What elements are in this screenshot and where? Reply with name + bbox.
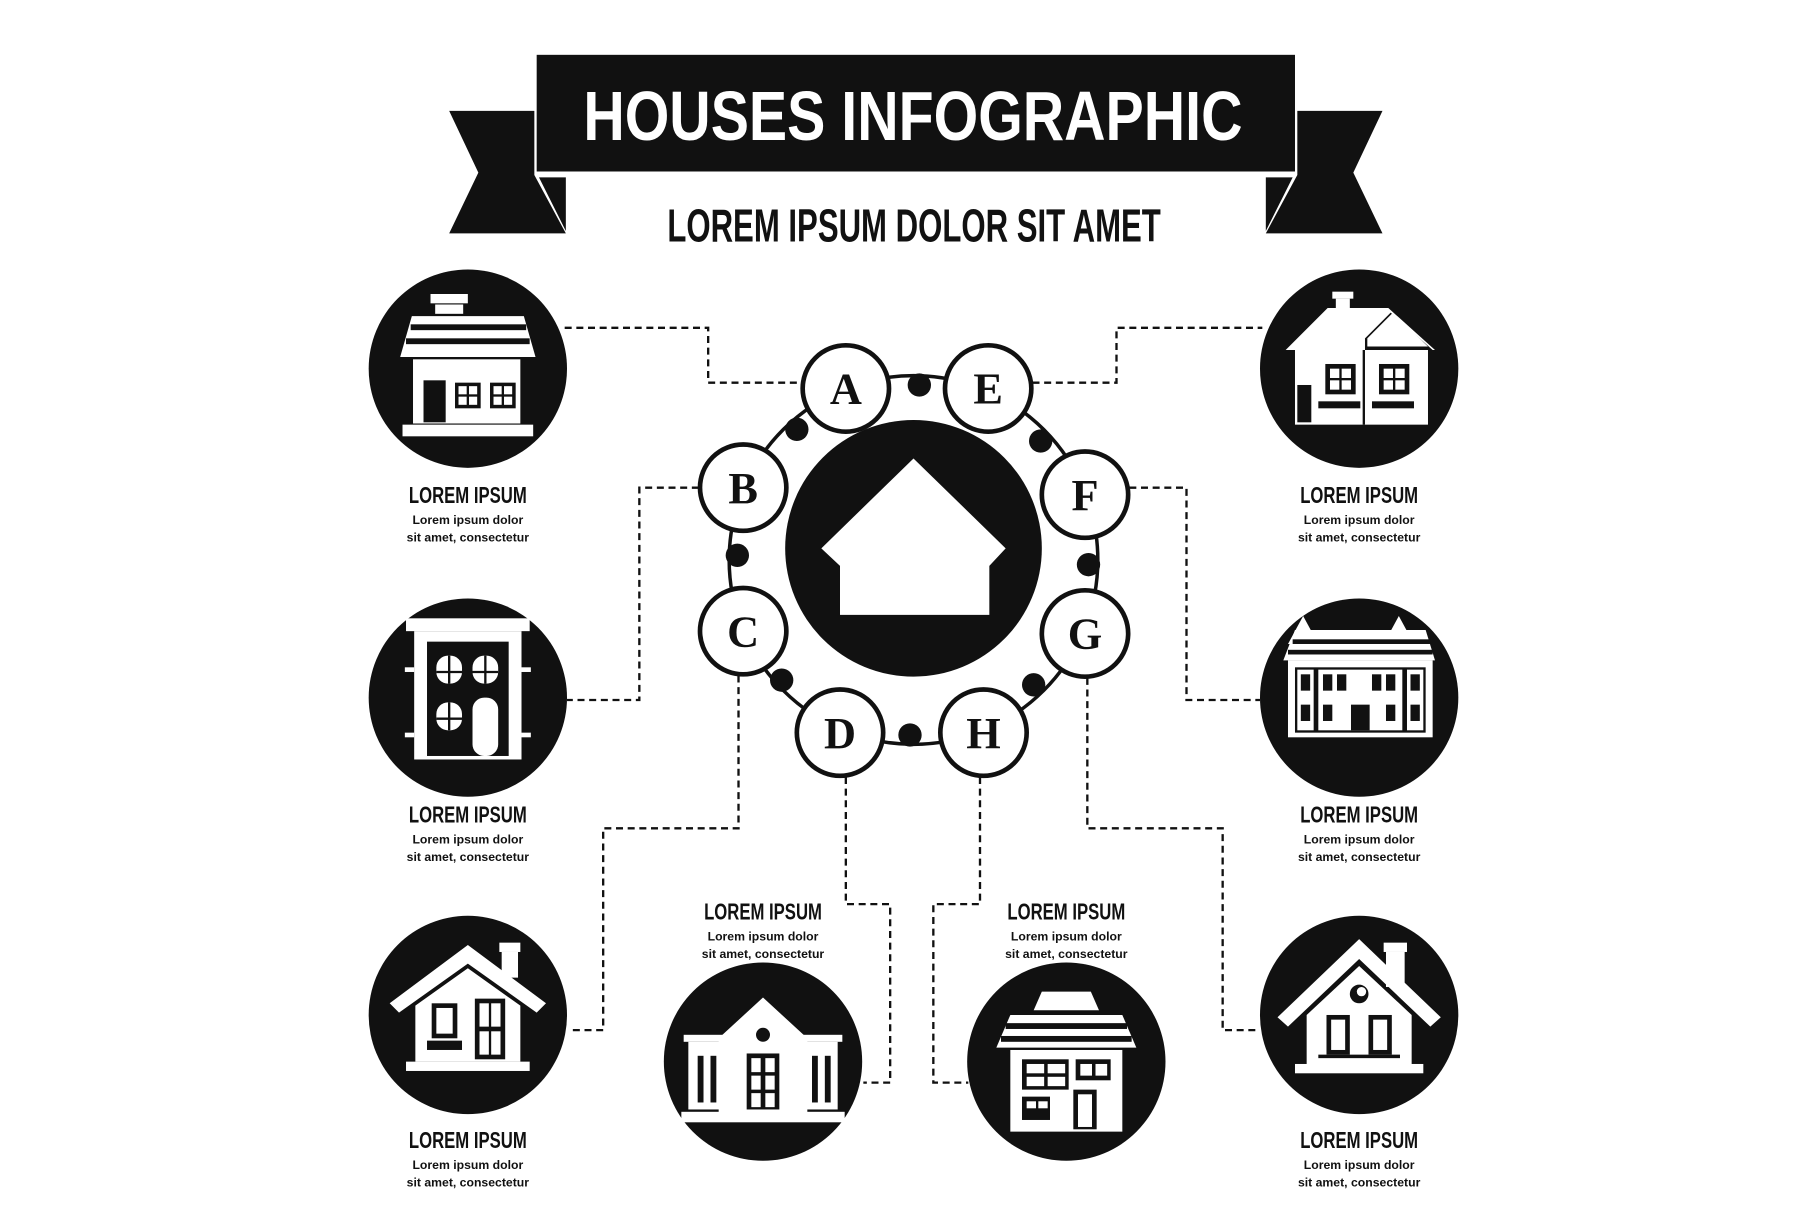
title text: HOUSES INFOGRAPHIC [583, 77, 1242, 155]
letter circles [700, 345, 1128, 776]
icon circle bottom left-center [664, 962, 862, 1161]
label 1: LOREM IPSUM [409, 482, 527, 508]
label 7: LOREM IPSUM [1300, 801, 1418, 827]
letters: G [1068, 609, 1102, 659]
labels [407, 482, 1421, 1189]
icon circle 2 [369, 598, 567, 797]
letters: H [966, 708, 1001, 758]
label 8: sit amet, consectetur [1298, 1175, 1421, 1189]
label 5: LOREM IPSUM [1007, 898, 1125, 924]
letters: D [824, 708, 856, 758]
label 8: Lorem ipsum dolor [1304, 1158, 1415, 1172]
label 5: Lorem ipsum dolor [1011, 929, 1122, 943]
letters [727, 364, 1102, 758]
icon circle right 2 [1260, 598, 1458, 797]
icon circle bottom right-center [967, 962, 1165, 1161]
label 2: LOREM IPSUM [409, 801, 527, 827]
label 3 [407, 1127, 529, 1189]
label 7: Lorem ipsum dolor [1304, 832, 1415, 846]
letters: E [973, 364, 1003, 414]
icon circle right 3 [1260, 916, 1458, 1114]
letters: C [727, 606, 759, 656]
label 3: LOREM IPSUM [409, 1127, 527, 1153]
label 4: LOREM IPSUM [704, 898, 822, 924]
letters: F [1071, 470, 1099, 520]
label 4: sit amet, consectetur [702, 947, 824, 961]
center circle with house icon [785, 420, 1042, 677]
letters: B [728, 463, 758, 513]
label 6 [1298, 482, 1421, 544]
title banner [449, 55, 1382, 233]
label 4 [702, 898, 824, 961]
label 8: LOREM IPSUM [1300, 1127, 1418, 1153]
icon circle right 1 [1260, 269, 1458, 468]
label 1 [407, 482, 529, 544]
label 1: Lorem ipsum dolor [412, 513, 523, 527]
dashed connectors [565, 328, 1262, 1083]
label 7 [1298, 801, 1421, 864]
label 6: Lorem ipsum dolor [1304, 513, 1415, 527]
label 7: sit amet, consectetur [1298, 850, 1421, 864]
icon circle 3 [369, 916, 567, 1114]
label 3: sit amet, consectetur [407, 1175, 529, 1189]
central ring [726, 373, 1100, 747]
label 6: sit amet, consectetur [1298, 530, 1421, 544]
label 2: sit amet, consectetur [407, 850, 529, 864]
label 5 [1005, 898, 1128, 961]
label 8 [1298, 1127, 1421, 1189]
label 2: Lorem ipsum dolor [412, 832, 523, 846]
label 5: sit amet, consectetur [1005, 947, 1128, 961]
label 6: LOREM IPSUM [1300, 482, 1418, 508]
subtitle: LOREM IPSUM DOLOR SIT AMET [667, 199, 1161, 251]
icon circle 1 [369, 269, 567, 468]
label 4: Lorem ipsum dolor [708, 929, 819, 943]
label 3: Lorem ipsum dolor [412, 1158, 523, 1172]
letters: A [830, 364, 862, 414]
label 2 [407, 801, 529, 864]
label 1: sit amet, consectetur [407, 530, 529, 544]
